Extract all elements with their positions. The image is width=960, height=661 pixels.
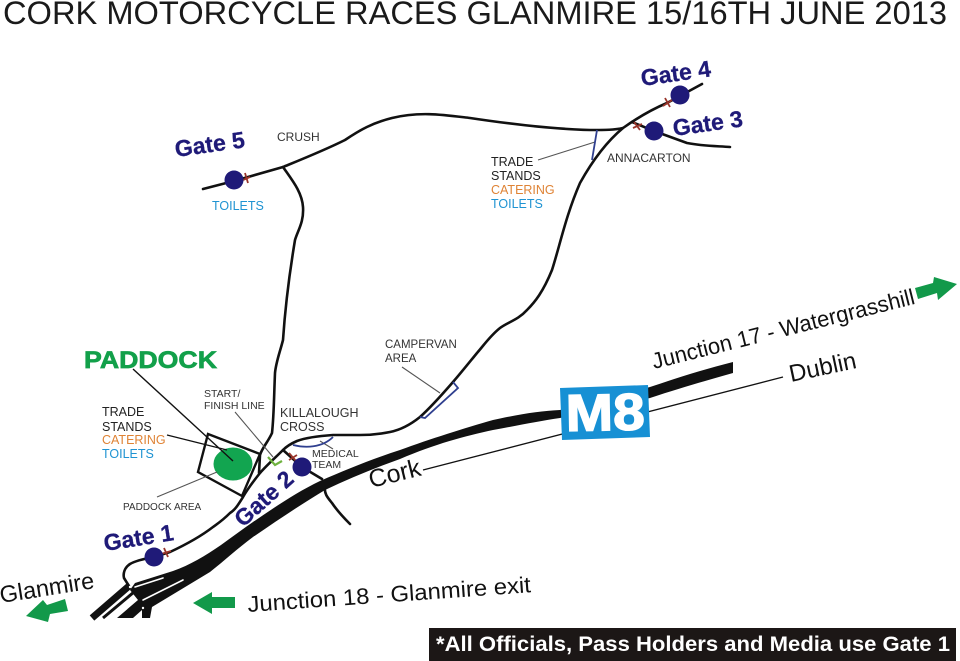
leader: start finish [235,412,273,457]
label: medical team: MEDICAL [312,448,359,460]
label: medical team: TEAM [312,459,341,471]
leader line: Cork to Dublin [423,377,783,470]
gate 2 marker [289,453,312,476]
road network [124,84,730,586]
label: killalough cross: KILLALOUGH [280,406,359,420]
label: Glanmire: Glanmire [0,567,96,608]
blue marked areas [293,130,597,447]
paddock facilities list [102,405,166,461]
notice bar: *All Officials, Pass Holders and Media use Gate 1 [436,633,950,656]
annacarton facilities list: CATERING [491,183,555,197]
label: annacarton: ANNACARTON [607,151,691,165]
gate 1 marker [144,548,171,566]
label: killalough cross [280,406,359,434]
paddock area outline [198,434,260,496]
paddock facilities list: CATERING [102,433,166,447]
interchange slip roads [92,578,183,618]
gate 3 marker [633,122,664,140]
leader: paddock trade stands [167,435,227,450]
gate 4 marker [663,86,690,107]
paddock facilities list: STANDS [102,420,152,434]
label: Cork: Cork [366,454,424,494]
leader: upper trade stands [538,142,595,160]
M8 motorway [117,362,733,618]
leader: paddock area [157,472,217,497]
paddock facilities list: TOILETS [102,447,154,461]
label: campervan area [385,339,457,365]
label: Dublin: Dublin [787,347,859,388]
label: campervan area: AREA [385,353,417,365]
label: paddock area: PADDOCK AREA [123,502,201,513]
annacarton facilities list: TOILETS [491,197,543,211]
label: Gate 4: Gate 4 [639,55,713,91]
label: Gate 1: Gate 1 [102,519,175,556]
label: Junction 18: Junction 18 - Glanmire exit [247,572,532,617]
start finish marker [268,457,282,465]
paddock facilities list: TRADE [102,405,144,419]
notice bar [429,628,956,661]
label: Gate 3: Gate 3 [671,105,744,141]
gate 5 marker [224,170,250,190]
label: start finish line: FINISH LINE [204,400,265,412]
arrow: to Watergrasshill [915,277,957,300]
label: medical team [312,448,359,471]
annacarton facilities list: TRADE [491,155,533,169]
label: start finish line [204,388,265,412]
arrow: Junction 18 [193,592,235,614]
paddock green circle [214,448,252,480]
label: Gate 5: Gate 5 [173,126,247,162]
label: Junction 17: Junction 17 - Watergrasshill [649,284,917,374]
label: campervan area: CAMPERVAN [385,339,457,351]
label: Gate 2: Gate 2 [229,465,299,532]
leader: campervan [402,367,440,393]
annacarton facilities list [491,155,555,211]
M8 sign: M8 [565,384,645,443]
leader: paddock [133,369,233,461]
label: start finish line: START/ [204,388,240,400]
annacarton facilities list: STANDS [491,169,541,183]
arrow: to Glanmire [26,599,68,622]
label: crush: CRUSH [277,130,320,144]
heading: paddock: PADDOCK [84,347,218,374]
leader: medical team [320,441,333,449]
label: gate 5 toilets: TOILETS [212,199,264,213]
label: killalough cross: CROSS [280,420,324,434]
